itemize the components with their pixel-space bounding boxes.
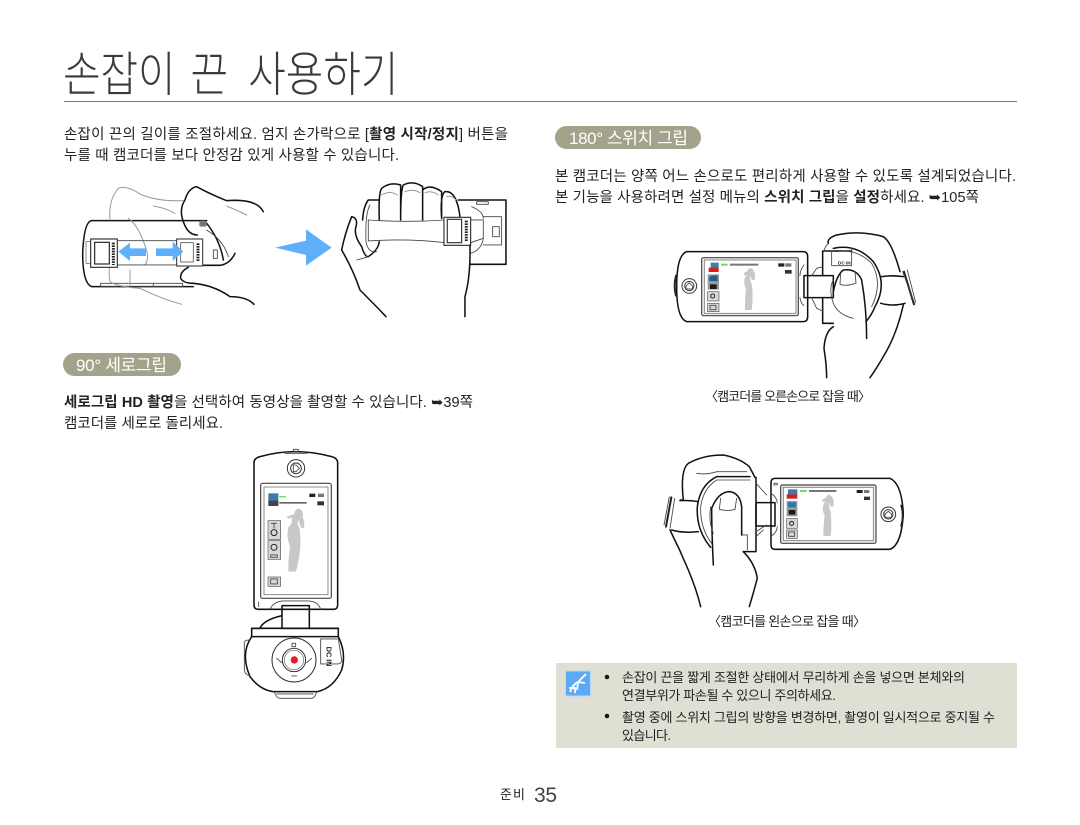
illustration: adjusting hand strap [83, 183, 506, 317]
icon: blue double arrow [118, 242, 183, 261]
footer: section label and page number [500, 784, 557, 807]
footer: section label and page number: 준비 [500, 787, 525, 802]
note bullet 1: 연결부위가 파손될 수 있으니 주의하세요. [622, 688, 836, 703]
text block: switch grip: 본 캠코더는 양쪽 어느 손으로도 편리하게 사용할 수 있도록 설계되었습니다. [555, 168, 1016, 185]
camera body, strap and hands [83, 187, 263, 304]
hinge and lens unit: DC IN [325, 647, 334, 667]
text block: vertical grip: 캠코더를 세로로 돌리세요. [64, 415, 223, 432]
hinge and lens unit [244, 606, 344, 698]
arrow: large blue [275, 229, 332, 266]
hinge, lens unit and right hand [804, 233, 916, 378]
pill heading: 90 degree grip [63, 353, 181, 376]
footer: section label and page number: 35 [534, 784, 557, 807]
note bullet 2 [605, 710, 995, 743]
pill heading: 180 degree switch grip: 180° 스위치 그립 [569, 129, 688, 148]
illustration: camera held in left hand [664, 455, 903, 607]
text block: strap adjustment: 손잡이 끈의 길이를 조절하세요. 엄지 손가락으로 [촬영 시작/정지] 버튼을 [64, 126, 508, 143]
illustration: camera held in right hand [675, 233, 916, 378]
text block: switch grip: 본 기능을 사용하려면 설정 메뉴의 스위치 그립을 설정하세요. ➥105쪽 [555, 189, 979, 206]
caption: left hand: 〈캠코더를 왼손으로 잡을 때〉 [708, 614, 866, 629]
text block: strap adjustment: 누를 때 캠코더를 보다 안정감 있게 사용할 수 있습니다. [64, 147, 399, 164]
LCD panel [675, 252, 808, 322]
text block: vertical grip: 세로그립 HD 촬영을 선택하여 동영상을 촬영할 수 있습니다. ➥39쪽 [64, 394, 473, 411]
note bullet 2: 촬영 중에 스위치 그립의 방향을 변경하면, 촬영이 일시적으로 중지될 수 [622, 710, 995, 725]
LCD panel [771, 478, 903, 549]
caption: right hand: 〈캠코더를 오른손으로 잡을 때〉 [705, 389, 871, 404]
note bullet 2: 있습니다. [622, 728, 671, 743]
camera held with strap tightened [342, 183, 506, 317]
hinge, lens unit and right hand: DC IN [838, 260, 851, 265]
title: 사용하기 [248, 49, 398, 102]
icon: note pencil [566, 671, 590, 696]
pill heading: 90 degree grip: 90° 세로그립 [76, 356, 167, 375]
hinge, lens unit and left hand [664, 455, 775, 607]
text block: switch grip [555, 168, 1016, 206]
LCD panel [254, 449, 338, 609]
note bullet 1: 손잡이 끈을 짧게 조절한 상태에서 무리하게 손을 넣으면 본체와의 [622, 670, 965, 685]
note panel [556, 663, 1017, 748]
title: 손잡이 [63, 49, 176, 102]
text block: vertical grip [64, 394, 473, 432]
illustration: camera in vertical position [244, 449, 344, 698]
title: 끈 [191, 49, 228, 102]
note bullet 1 [605, 670, 965, 703]
text block: strap adjustment [64, 126, 508, 164]
pill heading: 180 degree switch grip [555, 126, 701, 149]
